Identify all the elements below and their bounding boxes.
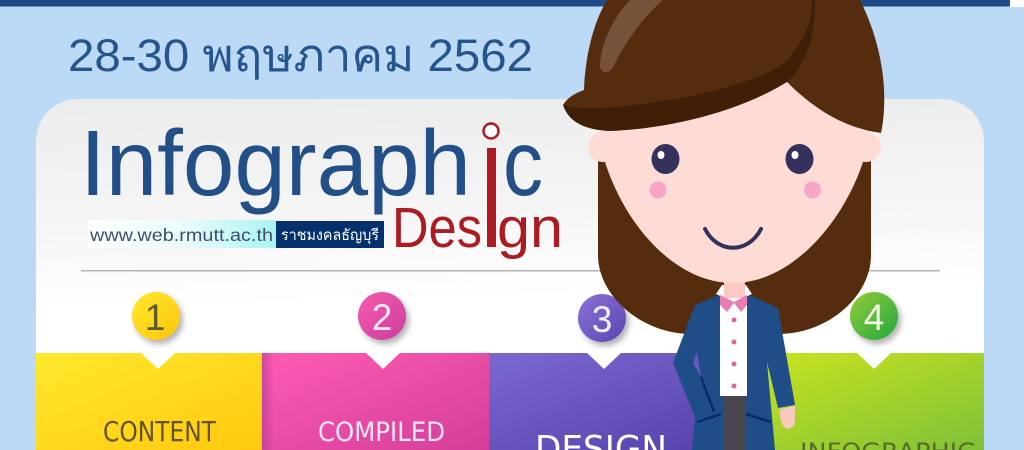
panel 1: content: CONTENT	[103, 415, 217, 448]
website banner	[88, 220, 384, 248]
face	[588, 40, 881, 283]
panel 2: compiled	[262, 353, 489, 450]
step badge 2: 2	[372, 297, 392, 338]
title: Infographic Design: gn	[497, 196, 563, 260]
divider	[81, 270, 940, 272]
title: Infographic Design	[80, 111, 563, 260]
step badge 3	[578, 294, 626, 342]
step badge 1: 1	[145, 297, 165, 338]
top hair	[563, 0, 812, 108]
website banner: www.web.rmutt.ac.th	[89, 225, 273, 245]
step badge 2	[358, 292, 406, 340]
title: Infographic Design: c	[503, 111, 543, 215]
title: Infographic Design: Infograph	[80, 111, 471, 215]
dark hair brim	[563, 0, 815, 131]
step badge 4: 4	[864, 297, 884, 338]
jacket and shirt	[673, 278, 795, 450]
panel 3: design	[489, 353, 739, 450]
title: Infographic Design: Des	[392, 196, 482, 260]
main card	[36, 99, 984, 450]
top bar	[0, 0, 1024, 7]
hair highlight	[600, 0, 663, 72]
step badge 4	[850, 292, 898, 340]
website banner: ราชมงคลธัญบุรี	[281, 227, 379, 245]
panel 1: content	[36, 353, 262, 450]
panel 2: compiled: COMPILED	[318, 417, 445, 448]
right fringe	[780, 0, 884, 133]
date heading: 28-30 พฤษภาคม 2562	[68, 30, 533, 81]
eyes, cheeks and smile	[650, 144, 821, 248]
panel 4: infographic	[739, 353, 984, 450]
back hair	[598, 150, 871, 334]
step badge 3: 3	[592, 299, 612, 340]
step badge 1	[132, 292, 180, 340]
character illustration	[563, 0, 884, 450]
